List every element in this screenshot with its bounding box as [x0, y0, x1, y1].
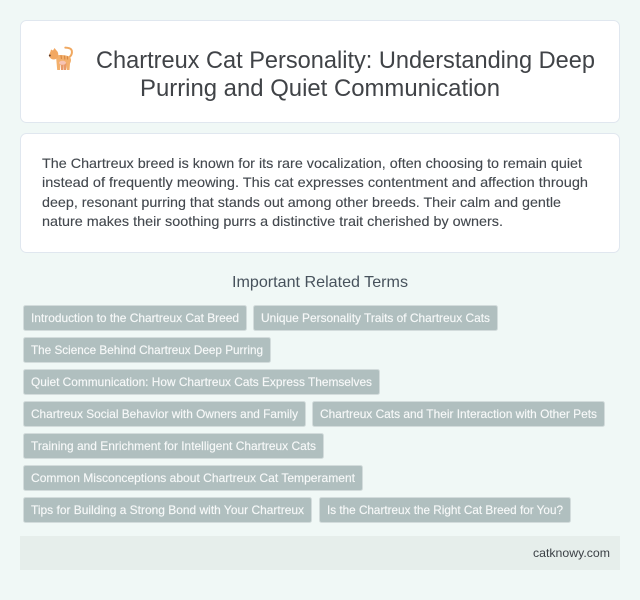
- tag: building a bond: Tips for Building a Strong Bond with Your Chartreux: [31, 503, 304, 517]
- tag: science of purring: The Science Behind Chartreux Deep Purring: [31, 343, 263, 357]
- text block: description: instead of frequently meowing. This cat expresses contentment and affection through: [42, 174, 588, 190]
- tag: other pets: [312, 402, 604, 426]
- tag: social behavior: [24, 402, 306, 426]
- icon: orange cat: [49, 48, 72, 70]
- heading: related terms: Important Related Terms: [232, 274, 408, 291]
- tag: social behavior: Chartreux Social Behavior with Owners and Family: [31, 407, 298, 421]
- tag: science of purring: [24, 338, 270, 362]
- tag: quiet communication: [24, 370, 380, 394]
- tag: quiet communication: Quiet Communication: How Chartreux Cats Express Themselves: [31, 375, 372, 389]
- tag: right breed: [320, 498, 570, 522]
- tag: training: Training and Enrichment for Intelligent Chartreux Cats: [31, 439, 316, 453]
- text block: description: [42, 155, 588, 229]
- tag: misconceptions: Common Misconceptions about Chartreux Cat Temperament: [31, 471, 356, 485]
- panel: description card: [20, 134, 620, 252]
- tag: introduction: [24, 306, 246, 330]
- heading: title: Chartreux Cat Personality: Understanding Deep: [96, 47, 595, 74]
- tag: training: [24, 434, 324, 458]
- tag: introduction: Introduction to the Chartreux Cat Breed: [31, 311, 239, 325]
- tag list: related terms: [24, 306, 604, 522]
- tag: personality traits: [254, 306, 498, 330]
- footer: catknowy.com: [533, 546, 610, 560]
- tag: building a bond: [24, 498, 312, 522]
- text block: description: The Chartreux breed is known for its rare vocalization, often choosing to remain quiet: [42, 155, 582, 171]
- tag: other pets: Chartreux Cats and Their Interaction with Other Pets: [320, 407, 597, 421]
- tag: personality traits: Unique Personality Traits of Chartreux Cats: [261, 311, 490, 325]
- tag: right breed: Is the Chartreux the Right Cat Breed for You?: [327, 503, 563, 517]
- heading: title: [96, 47, 595, 102]
- text block: description: deep, resonant purring that stands out among other breeds. Their calm and gentle: [42, 194, 561, 210]
- tag: misconceptions: [24, 466, 362, 490]
- heading: title: Purring and Quiet Communication: [140, 75, 500, 102]
- text block: description: nature makes their soothing purrs a distinctive trait cherished by owners.: [42, 213, 503, 229]
- footer: [20, 536, 620, 570]
- panel: title card: [20, 20, 620, 122]
